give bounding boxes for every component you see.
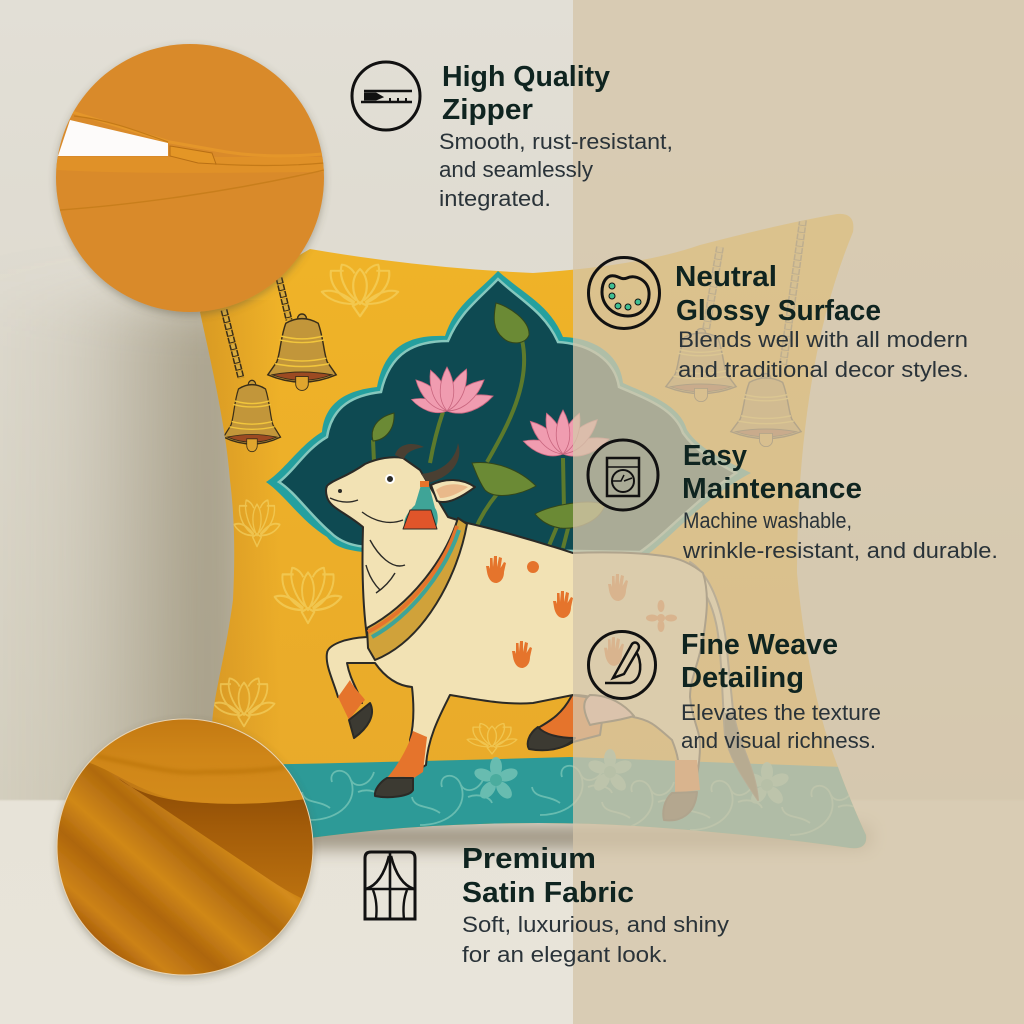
standing hoofs and orange socks [387, 731, 427, 778]
shadow wedge [119, 778, 312, 898]
feature: fine weave detailing: and visual richness. [681, 728, 876, 753]
feature: neutral glossy surface: Blends well with all modern [678, 327, 968, 352]
feature: fine weave detailing: Fine Weave [681, 629, 838, 661]
udder [584, 695, 634, 725]
feature: easy maintenance: Machine washable, [683, 508, 852, 533]
feature: fine weave detailing: Elevates the texture [681, 700, 881, 725]
icon: washing machine [588, 440, 658, 510]
feature: premium satin fabric: Premium [462, 843, 596, 875]
cow [326, 443, 758, 820]
feature: premium satin fabric [365, 843, 729, 967]
pillow [190, 200, 870, 860]
feature: easy maintenance: Maintenance [682, 473, 862, 505]
background wall and floor [0, 155, 870, 863]
face [386, 475, 394, 483]
cow body [326, 457, 707, 775]
far hind leg [538, 696, 602, 750]
translucent overlay panel [573, 0, 1024, 1024]
zipper detail circle [56, 44, 330, 312]
ear [431, 480, 475, 502]
feature: premium satin fabric: Satin Fabric [462, 877, 634, 909]
pink lotus flowers [410, 366, 611, 461]
feature: easy maintenance: Easy [683, 440, 747, 472]
bells and ropes [224, 220, 803, 452]
collar [367, 518, 467, 660]
horns [395, 444, 424, 459]
feature: easy maintenance [588, 440, 998, 563]
feature: high quality zipper: Zipper [442, 94, 533, 126]
teal floral band [200, 749, 870, 860]
icon: needle and thread [588, 632, 656, 698]
feature: neutral glossy surface: and traditional decor styles. [678, 357, 969, 382]
top fold [90, 720, 304, 804]
feature: easy maintenance: wrinkle-resistant, and durable. [682, 538, 998, 563]
feature: premium satin fabric: Soft, luxurious, and shiny [462, 912, 729, 937]
feature: neutral glossy surface [588, 258, 969, 382]
feature: fine weave detailing [588, 629, 881, 753]
feature: high quality zipper: Smooth, rust-resistant, [439, 129, 673, 154]
feature: premium satin fabric: for an elegant look. [462, 942, 668, 967]
feature: high quality zipper: integrated. [439, 186, 551, 211]
satin fabric detail circle [50, 700, 320, 975]
feature: high quality zipper: and seamlessly [439, 157, 593, 182]
tail [690, 562, 758, 800]
lotus motifs [213, 265, 517, 754]
feature: neutral glossy surface: Neutral [675, 261, 777, 293]
arch panel [266, 271, 751, 560]
icon: curtains [365, 852, 415, 919]
lotus stems and leaves [372, 303, 605, 548]
icon: palette [588, 258, 660, 328]
feature: neutral glossy surface: Glossy Surface [676, 295, 881, 327]
icon: zipper [352, 62, 420, 130]
pillow yellow ground [190, 200, 870, 860]
tassel [404, 485, 438, 528]
feature: high quality zipper [352, 61, 673, 211]
feature: fine weave detailing: Detailing [681, 662, 804, 694]
neck folds [362, 512, 405, 593]
feature: high quality zipper: High Quality [442, 61, 610, 93]
orange spots [486, 556, 677, 668]
